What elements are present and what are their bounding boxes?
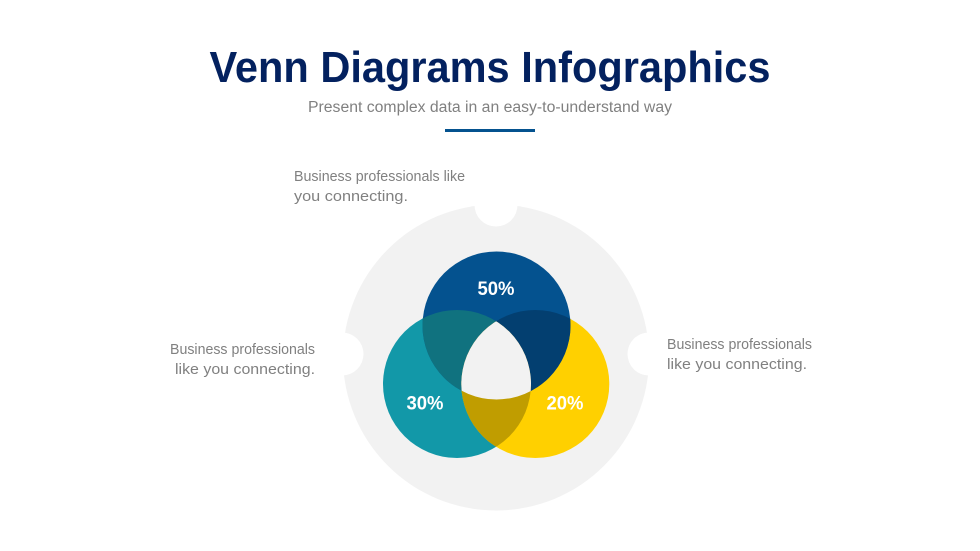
text block: right: Business professionals <box>667 336 812 353</box>
title underline <box>445 129 535 132</box>
text block: left: Business professionals <box>170 341 315 358</box>
overlap: top and right <box>492 310 570 392</box>
subtitle: Present complex data in an easy-to-understand way <box>308 99 672 116</box>
background disc with notches <box>320 184 670 510</box>
text block: right: like you connecting. <box>667 356 807 373</box>
text block: top: you connecting. <box>294 188 408 205</box>
text block: left: like you connecting. <box>175 361 315 378</box>
label: 50%: 50% <box>478 279 515 300</box>
circle: left teal <box>383 310 531 458</box>
overlap: centre <box>461 321 531 400</box>
circle: right yellow <box>461 310 609 458</box>
infographic canvas <box>171 50 812 510</box>
text block: left <box>170 341 315 378</box>
label: 20%: 20% <box>546 394 584 414</box>
overlap: top and left <box>422 310 496 390</box>
text block: top <box>294 168 465 205</box>
text block: right <box>667 336 812 373</box>
title: Venn Diagrams Infographics <box>210 43 770 92</box>
venn diagram <box>383 252 609 458</box>
circle: top blue <box>422 252 570 400</box>
text block: top: Business professionals like <box>294 168 465 185</box>
overlap: left and right <box>461 321 531 447</box>
label: 30%: 30% <box>406 394 444 414</box>
